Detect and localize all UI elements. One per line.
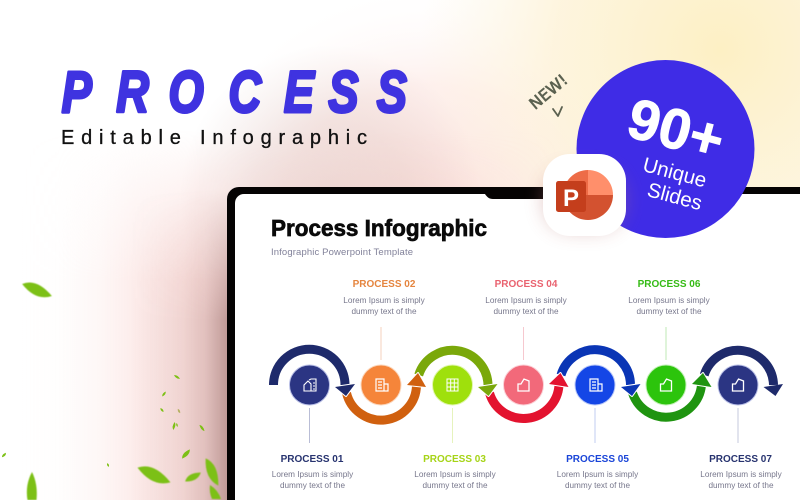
label: process 06 (628, 279, 711, 316)
label: process 02 (343, 279, 426, 316)
arrow 1 (274, 349, 355, 396)
label: process 02: Lorem Ipsum is simply (343, 296, 426, 305)
label: process 07 (700, 454, 783, 490)
label: process 03: PROCESS 03 (423, 454, 486, 465)
node 1 with building icon (290, 365, 330, 405)
label: process 03: Lorem Ipsum is simply (414, 470, 497, 479)
arrow 2 (346, 373, 426, 420)
label: process 02: PROCESS 02 (353, 279, 416, 290)
leaves (1, 279, 223, 500)
label: process 05: Lorem Ipsum is simply (557, 470, 639, 479)
label: process 02: dummy text of the (351, 307, 417, 316)
label: process 04: dummy text of the (493, 307, 559, 316)
node 3 with grid icon (432, 365, 472, 405)
icon: PowerPoint app tile: P (563, 185, 579, 212)
label: process 01 (272, 454, 354, 490)
new label: NEW! (525, 70, 572, 113)
title: PROCESS: PROCESS (62, 61, 407, 125)
arrow 3 (419, 350, 498, 396)
label: process 01: PROCESS 01 (281, 454, 344, 465)
label: process 06: dummy text of the (636, 307, 702, 316)
arrow 4 (490, 373, 568, 418)
node 7 with factory icon (718, 365, 758, 405)
arrow 6 (632, 373, 712, 417)
label: process 05: dummy text of the (565, 481, 630, 490)
label: process 04 (485, 279, 568, 316)
connector lines (310, 327, 738, 443)
badge: 90+ unique slides: Unique (640, 153, 709, 192)
label: process 04: Lorem Ipsum is simply (485, 296, 568, 305)
node 5 with building icon (575, 365, 615, 405)
label: process 07: dummy text of the (708, 481, 774, 490)
label: process 04: PROCESS 04 (495, 279, 558, 290)
label: process 07: PROCESS 07 (709, 454, 772, 465)
label: process 07: Lorem Ipsum is simply (700, 470, 783, 479)
label: process 06: PROCESS 06 (638, 279, 701, 290)
arrow 7 (704, 350, 783, 396)
label: process 03: dummy text of the (422, 481, 488, 490)
slide subheading: Infographic Powerpoint Template (271, 247, 413, 258)
laptop frame (227, 187, 800, 500)
label: process 01: dummy text of the (280, 481, 345, 490)
label: process 06: Lorem Ipsum is simply (628, 296, 711, 305)
node 4 with factory icon (504, 365, 544, 405)
label: process 01: Lorem Ipsum is simply (272, 470, 354, 479)
label: process 05 (557, 454, 639, 490)
node 6 with factory icon (646, 365, 686, 405)
node 2 with building icon (361, 365, 401, 405)
arrow 5 (561, 350, 640, 396)
icon: PowerPoint app tile (543, 154, 626, 236)
badge: 90+ unique slides: Slides (645, 178, 705, 215)
label: process 05: PROCESS 05 (566, 454, 629, 465)
badge: 90+ unique slides (576, 60, 754, 238)
badge: 90+ unique slides: 90+ (621, 86, 731, 173)
subtitle: Editable Infographic: Editable Infographic (61, 127, 367, 149)
label: process 03 (414, 454, 497, 490)
slide heading: Process Infographic (271, 215, 487, 241)
